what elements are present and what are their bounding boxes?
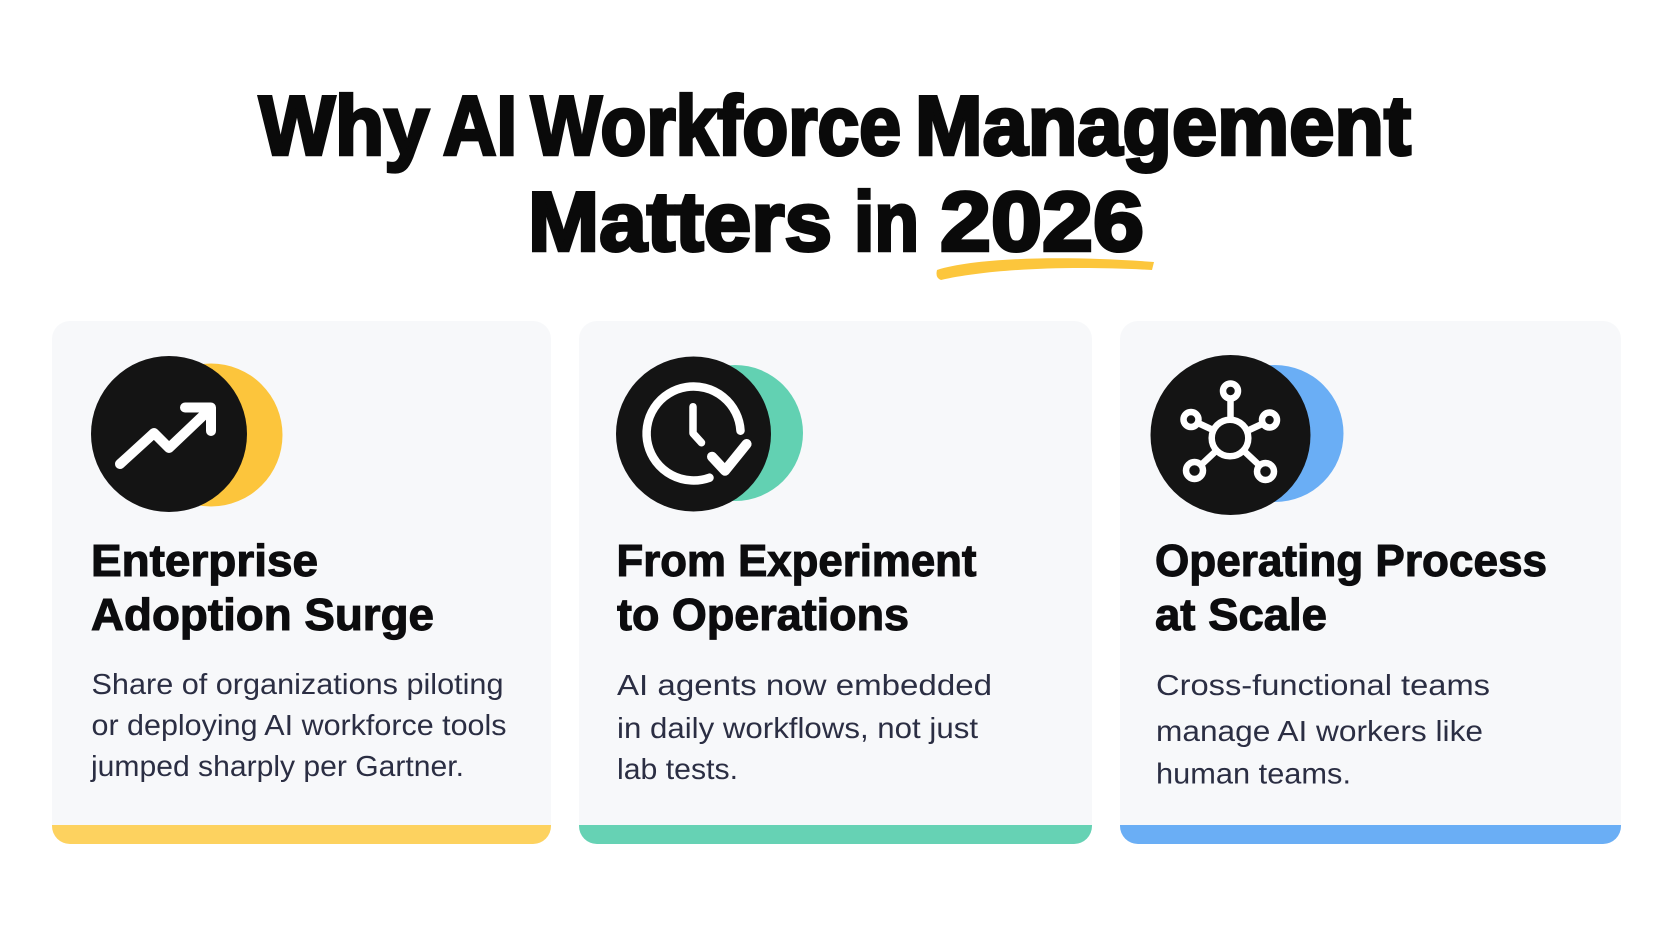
- heading: [616, 535, 977, 640]
- body text: Share of organizations piloting: [92, 669, 504, 701]
- heading: Enterprise: [91, 535, 318, 586]
- body text: [90, 669, 507, 783]
- title: Matters: [528, 174, 832, 268]
- card background: [1120, 321, 1621, 844]
- yellow accent bar: [52, 825, 551, 844]
- body text: AI agents now embedded: [617, 670, 992, 702]
- icon: network hub: [1150, 355, 1344, 515]
- body text: lab tests.: [617, 754, 738, 786]
- heading: Operating Process: [1155, 535, 1547, 586]
- heading: From Experiment: [616, 535, 977, 586]
- title: Management: [915, 78, 1411, 172]
- body text: manage AI workers like: [1156, 716, 1483, 748]
- title: Workforce: [531, 78, 901, 172]
- body text: or deploying AI workforce tools: [92, 710, 506, 742]
- panel: from experiment to operations: [579, 321, 1092, 844]
- body text: jumped sharply per Gartner.: [90, 751, 464, 783]
- blue accent bar: [1120, 825, 1621, 844]
- yellow underline accent: [936, 258, 1154, 280]
- heading: [91, 535, 434, 640]
- card background: [579, 321, 1092, 844]
- heading: at Scale: [1155, 589, 1327, 640]
- panel: enterprise adoption surge: [52, 321, 551, 844]
- icon: clock with check: [616, 356, 803, 512]
- title: Why: [259, 78, 429, 172]
- title: AI: [443, 78, 517, 172]
- title: in: [854, 174, 919, 268]
- icon: growth arrow: [91, 356, 282, 512]
- body text: [1156, 670, 1490, 790]
- card background: [52, 321, 551, 844]
- panel: operating process at scale: [1120, 321, 1621, 844]
- green accent bar: [579, 825, 1092, 844]
- heading: to Operations: [617, 589, 909, 640]
- body text: human teams.: [1156, 758, 1351, 790]
- title: 2026: [940, 174, 1144, 268]
- heading: Adoption Surge: [91, 589, 434, 640]
- body text: [617, 670, 992, 786]
- body text: Cross-functional teams: [1156, 670, 1490, 702]
- heading: [1155, 535, 1547, 640]
- title: [259, 78, 1411, 268]
- body text: in daily workflows, not just: [617, 713, 978, 745]
